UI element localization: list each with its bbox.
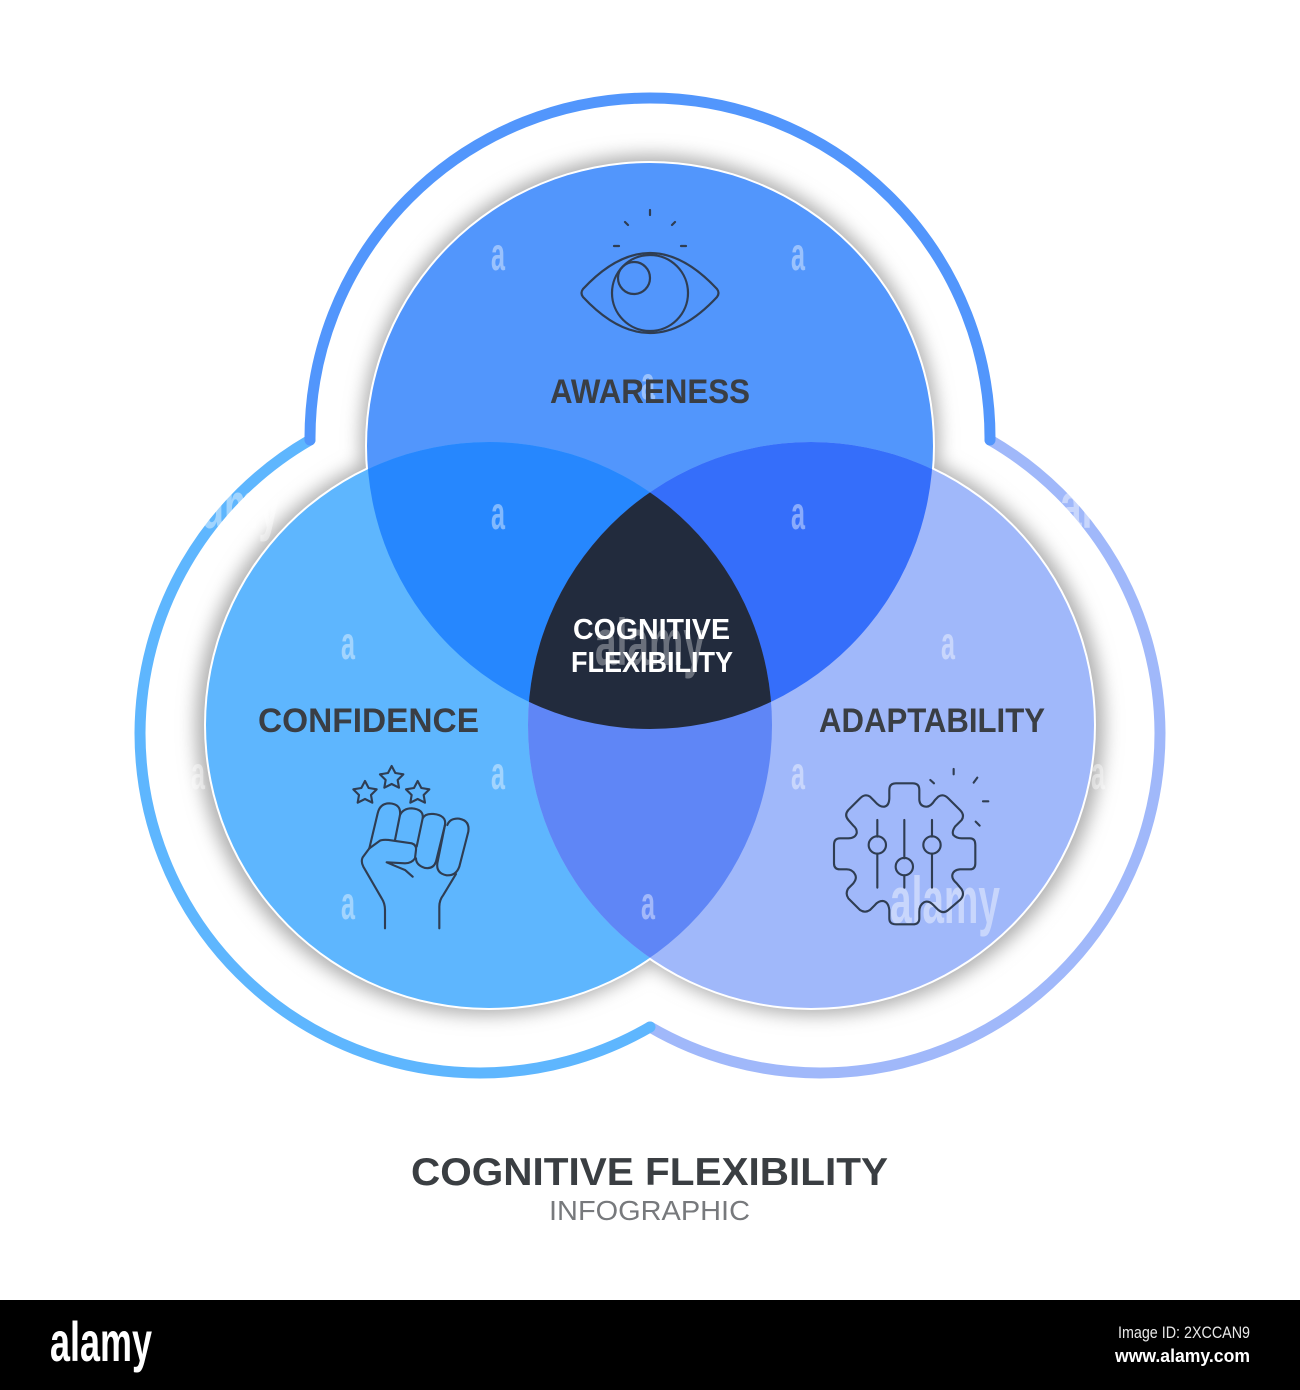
watermark letters <box>191 228 1105 929</box>
circle: adaptability <box>528 442 1094 1008</box>
footer logo: alamy <box>50 1310 152 1373</box>
venn diagram <box>204 161 1096 1010</box>
watermark letters: a <box>341 877 355 929</box>
outer ring: adaptability <box>650 440 1160 1073</box>
subtitle: INFOGRAPHIC <box>549 1195 750 1226</box>
watermark letters: a <box>791 228 805 280</box>
label: cognitive: COGNITIVE <box>573 614 730 646</box>
icon: raised fist with stars <box>353 766 469 928</box>
label: flexibility: FLEXIBILITY <box>571 647 733 679</box>
watermark: left ring: alamy <box>170 468 280 542</box>
watermark: center: alamy <box>595 605 705 679</box>
watermark letters: a <box>491 487 505 539</box>
circle: confidence <box>206 442 772 1008</box>
icon: gear with sliders <box>834 769 988 924</box>
label: awareness: AWARENESS <box>550 373 750 411</box>
watermark: right ring: alamy <box>1060 468 1170 542</box>
title: COGNITIVE FLEXIBILITY <box>411 1151 888 1194</box>
footer bar <box>0 1300 1300 1390</box>
label: confidence: CONFIDENCE <box>258 702 479 740</box>
watermark letters: a <box>191 747 205 799</box>
watermark letters: a <box>491 228 505 280</box>
overlap: confidence and adaptability <box>528 493 772 958</box>
outer ring: awareness <box>310 98 990 440</box>
footer image id: Image ID: 2XCCAN9 <box>1118 1323 1250 1342</box>
overlap: awareness and confidence <box>368 442 650 702</box>
outer ring: confidence <box>140 440 650 1073</box>
watermark letters: a <box>491 747 505 799</box>
circle shadows <box>196 155 1104 1015</box>
label: adaptability: ADAPTABILITY <box>819 702 1045 740</box>
watermark letters: a <box>1091 747 1105 799</box>
watermark letters: a <box>341 617 355 669</box>
footer url: www.alamy.com <box>1114 1346 1250 1366</box>
watermark: lower right: alamy <box>890 863 1000 937</box>
watermark letters: a <box>791 747 805 799</box>
overlap: awareness and adaptability <box>650 442 932 702</box>
watermark letters: a <box>791 487 805 539</box>
watermark letters: a <box>941 617 955 669</box>
center overlap <box>529 492 771 729</box>
watermark letters: a <box>641 357 655 409</box>
circle: awareness <box>367 163 933 729</box>
watermark letters: a <box>641 877 655 929</box>
icon: eye <box>582 210 718 333</box>
center label <box>571 614 733 679</box>
